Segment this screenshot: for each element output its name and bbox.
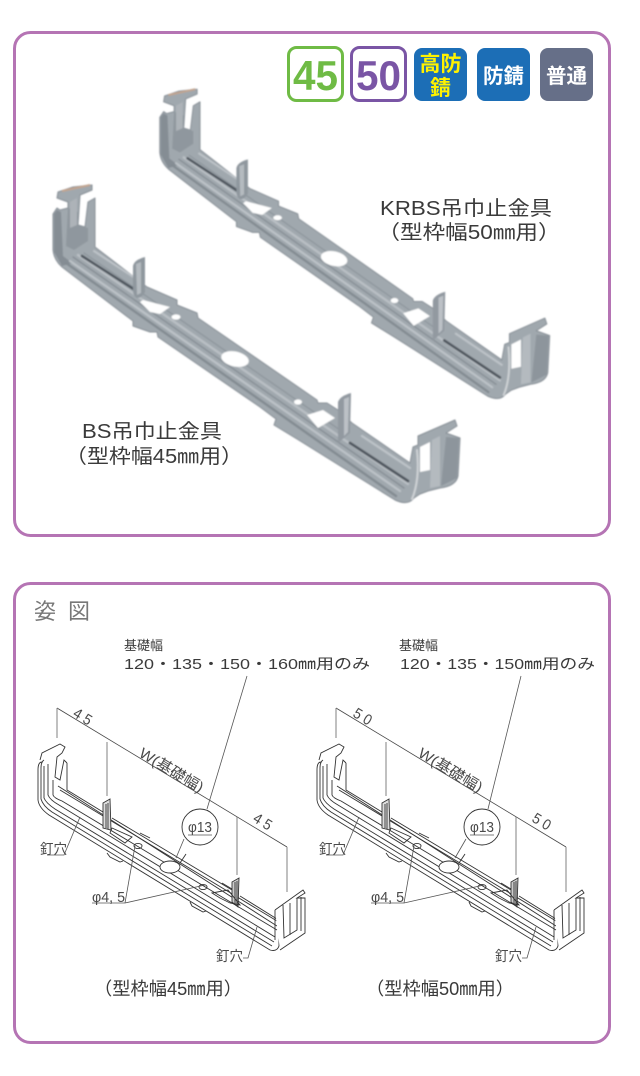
drawing: 45mm xyxy=(38,676,305,964)
badge: 防錆: 防錆 xyxy=(483,65,524,88)
note: left widths xyxy=(124,638,370,673)
badge: 防錆 xyxy=(477,48,530,101)
heading: 姿図: 姿 図 xyxy=(34,599,90,624)
badge: 高防錆: 錆 xyxy=(430,77,451,100)
drawing: 45mm: 4 5 xyxy=(70,705,95,729)
note: right widths: 120・135・150㎜用のみ xyxy=(400,657,595,673)
drawing: 50mm: 釘穴 xyxy=(319,841,346,857)
panel: product photo xyxy=(14,32,610,536)
drawing: 45mm: W(基礎幅) xyxy=(136,745,206,797)
badge: 普通: 普通 xyxy=(546,65,587,88)
drawing: 45mm: φ4, 5 xyxy=(92,889,125,906)
label: BS: （型枠幅45㎜用） xyxy=(65,445,243,468)
caption: 50mm: （型枠幅50㎜用） xyxy=(366,979,514,999)
note: right widths: 基礎幅 xyxy=(399,638,438,653)
caption: 45mm: （型枠幅45㎜用） xyxy=(94,979,242,999)
badge: 高防錆: 高防 xyxy=(420,53,462,76)
drawing: 50mm xyxy=(317,676,584,964)
drawing: 45mm: 釘穴 xyxy=(216,948,243,964)
drawing: 45mm: φ13 xyxy=(188,819,212,836)
drawing: 45mm: 釘穴 xyxy=(40,841,67,857)
note: right widths xyxy=(399,638,595,673)
drawing: 50mm: 5 0 xyxy=(350,705,375,729)
label: KRBS xyxy=(378,197,560,244)
photo: BS bracket xyxy=(53,185,460,503)
drawing: 45mm: 4 5 xyxy=(250,810,275,834)
badge: 高防錆 xyxy=(414,48,467,101)
label: KRBS: （型枠幅50㎜用） xyxy=(378,221,560,244)
drawing: 50mm: 5 0 xyxy=(529,810,554,834)
label: KRBS: KRBS吊巾止金具 xyxy=(380,197,552,220)
badge: 45: 45 xyxy=(293,52,338,99)
panel: drawings xyxy=(14,584,610,1042)
label: BS: BS吊巾止金具 xyxy=(82,420,222,443)
badge: 普通 xyxy=(540,48,593,101)
photo: KRBS bracket xyxy=(160,89,550,399)
drawing: 50mm: φ13 xyxy=(470,819,494,836)
badge: 50: 50 xyxy=(356,52,401,99)
drawing: 50mm: W(基礎幅) xyxy=(415,745,485,797)
note: left widths: 基礎幅 xyxy=(124,638,163,653)
label: BS xyxy=(65,420,243,468)
drawing: 50mm: φ4, 5 xyxy=(371,889,404,906)
note: left widths: 120・135・150・160㎜用のみ xyxy=(124,657,370,673)
drawing: 50mm: 釘穴 xyxy=(495,948,522,964)
